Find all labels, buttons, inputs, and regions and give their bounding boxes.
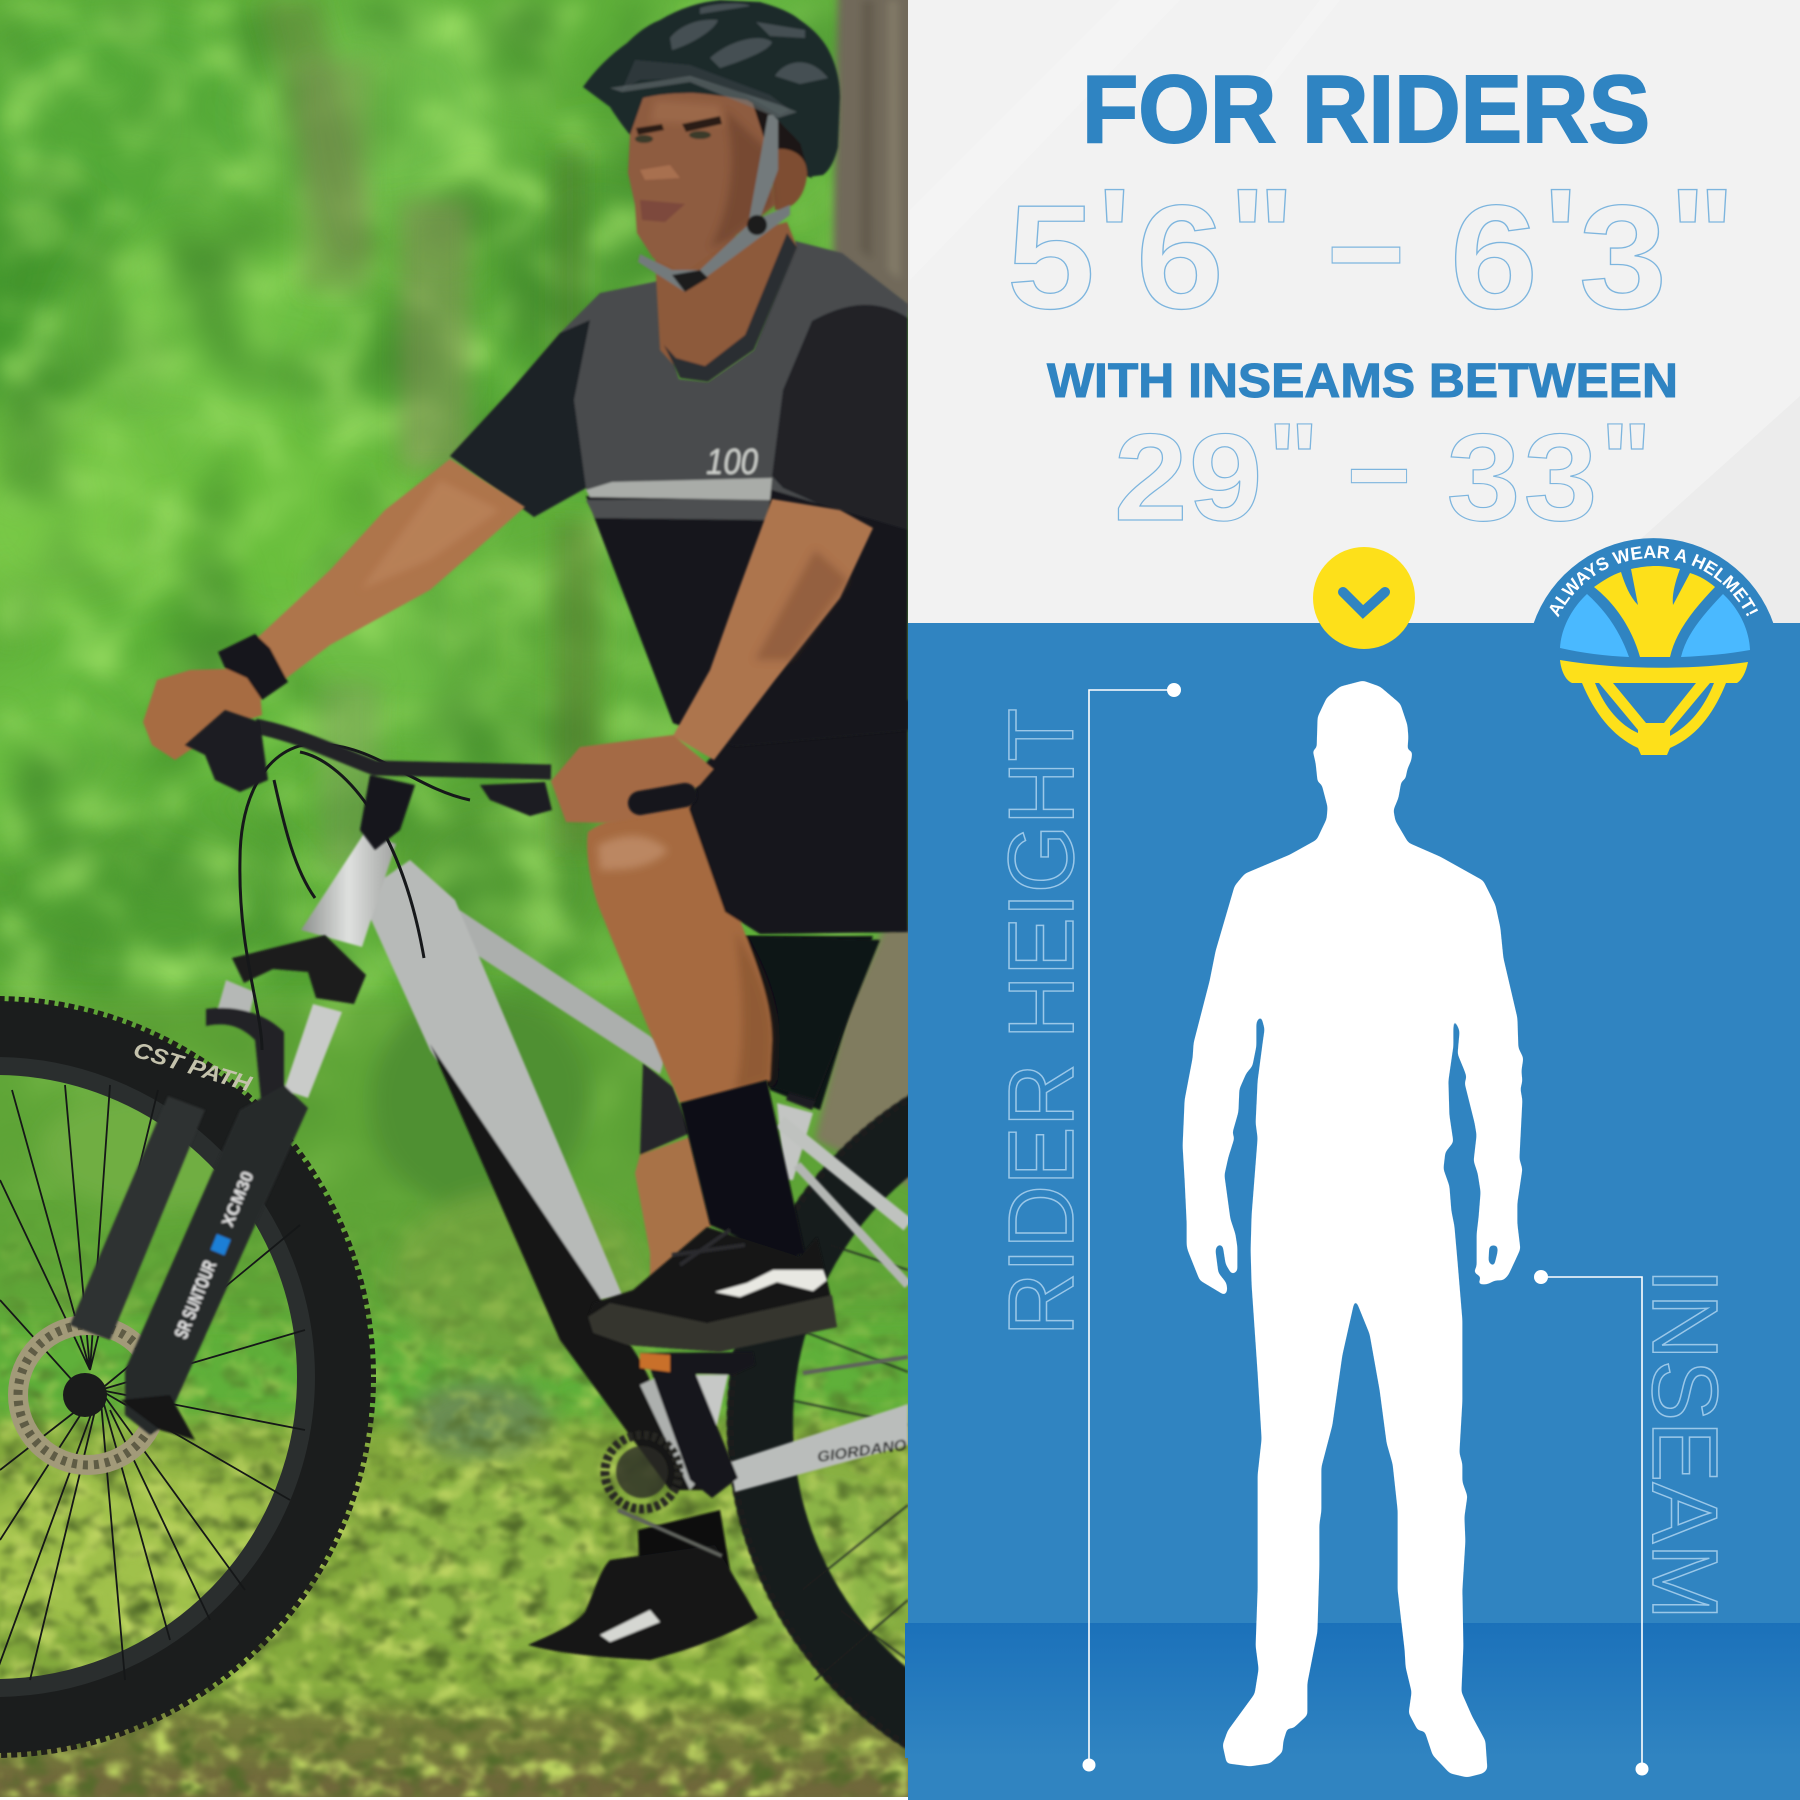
foliage mottling	[0, 0, 908, 1200]
top tube	[396, 868, 668, 1074]
height measurement line	[1082, 683, 1181, 1772]
helmet vent panels	[1560, 594, 1629, 657]
sleeve: left	[450, 320, 590, 517]
helmet rim and straps	[1560, 660, 1748, 755]
chest stripe	[586, 478, 772, 500]
chainring	[605, 1435, 679, 1509]
text: height range 5'6" to 6'3": 5	[1007, 175, 1095, 340]
left hand	[143, 668, 262, 760]
text: inseam range 29" to 33": 2	[1114, 409, 1188, 547]
tree trunks	[815, 0, 918, 1190]
back shoe	[528, 1545, 758, 1660]
subtitle: with inseams between: WITH INSEAMS BETWEEN	[1047, 355, 1678, 408]
suspension fork	[70, 935, 366, 1440]
sleeve: right	[772, 305, 908, 535]
rider shirt	[450, 241, 908, 746]
icon: yellow chevron down circle	[1313, 547, 1415, 649]
neck	[655, 222, 797, 378]
text: height range 5'6" to 6'3": 6	[1450, 175, 1538, 340]
text: inseam range 29" to 33": "	[1601, 402, 1651, 514]
text: inseam range dash: –	[1348, 392, 1410, 541]
down tube silver	[360, 860, 623, 1300]
left arm	[255, 459, 525, 680]
forest background	[0, 0, 940, 1800]
icon: always wear a helmet badge: ALWAYS WEAR A HELMET!	[1550, 546, 1758, 618]
title: for riders: FOR RIDERS	[1082, 56, 1650, 163]
suspension fork: XCM30	[218, 1169, 257, 1229]
tyre lettering: CST PATH	[131, 1037, 256, 1097]
chain stay	[730, 1404, 908, 1492]
lower shirt dark	[586, 490, 908, 746]
icon: always wear a helmet badge	[1534, 538, 1774, 755]
right arm	[673, 499, 873, 760]
lower foliage and ground	[0, 990, 940, 1800]
text: inseam range 29" to 33": 9	[1189, 409, 1263, 547]
rider thigh and shorts	[587, 700, 908, 1103]
text: inseam range 29" to 33": 3	[1447, 409, 1520, 547]
seat tube behind pedal	[693, 1375, 728, 1425]
label: rider height vertical text: RIDER HEIGHT	[989, 708, 1093, 1336]
text: height range 5'6" to 6'3": 3	[1579, 175, 1667, 340]
text: height range 5'6" to 6'3": "	[1669, 161, 1735, 307]
text: height range dash: –	[1328, 153, 1404, 332]
disc brake rotor	[18, 1325, 158, 1465]
lower frame silver to bottom bracket	[640, 1372, 715, 1490]
text: height range 5'6" to 6'3": '	[1544, 161, 1577, 307]
brake cables	[240, 744, 470, 1050]
frame brand text: GIORDANO	[816, 1437, 908, 1466]
face	[628, 78, 775, 272]
panel: photo of rider on mountain bike in forest	[0, 0, 908, 1797]
crank arm	[650, 1360, 738, 1498]
pedal	[640, 1352, 755, 1375]
watch	[218, 634, 288, 700]
panel: light grey header background	[908, 0, 1800, 624]
front wheel	[0, 1000, 372, 1754]
handlebar	[185, 710, 685, 850]
bike frame	[301, 832, 908, 1556]
hair and ear	[745, 90, 812, 178]
chain	[618, 1357, 908, 1556]
helmet strap	[638, 115, 790, 292]
spokes	[0, 1085, 305, 1690]
down tube black	[430, 1044, 705, 1490]
text: height range 5'6" to 6'3": 6	[1136, 175, 1224, 340]
rear wheel	[725, 1094, 908, 1750]
right hand	[551, 735, 714, 823]
suspension fork: SR SUNTOUR	[171, 1258, 221, 1342]
inseam measurement line	[1534, 1270, 1648, 1776]
seat post and rear triangle	[735, 936, 908, 1285]
label: inseam vertical text: INSEAM	[1633, 1268, 1737, 1620]
floor band	[905, 1623, 1800, 1758]
panel: blue rider silhouette background	[905, 623, 1800, 1800]
text: inseam range 29" to 33": 3	[1524, 409, 1597, 547]
head tube	[301, 832, 396, 947]
white human silhouette	[1183, 681, 1523, 1777]
badge curved text	[1553, 558, 1753, 631]
sock and front shoe	[588, 1080, 837, 1352]
back leg and back shoe	[528, 1063, 758, 1660]
text: height range 5'6" to 6'3": "	[1229, 161, 1295, 307]
helmet	[583, 0, 840, 177]
rider neck and head	[583, 0, 840, 382]
rider arms and hands	[143, 459, 873, 823]
text: inseam range 29" to 33": "	[1268, 402, 1319, 514]
text: height range 5'6" to 6'3": '	[1098, 161, 1131, 307]
chest logo: 100	[706, 441, 758, 482]
